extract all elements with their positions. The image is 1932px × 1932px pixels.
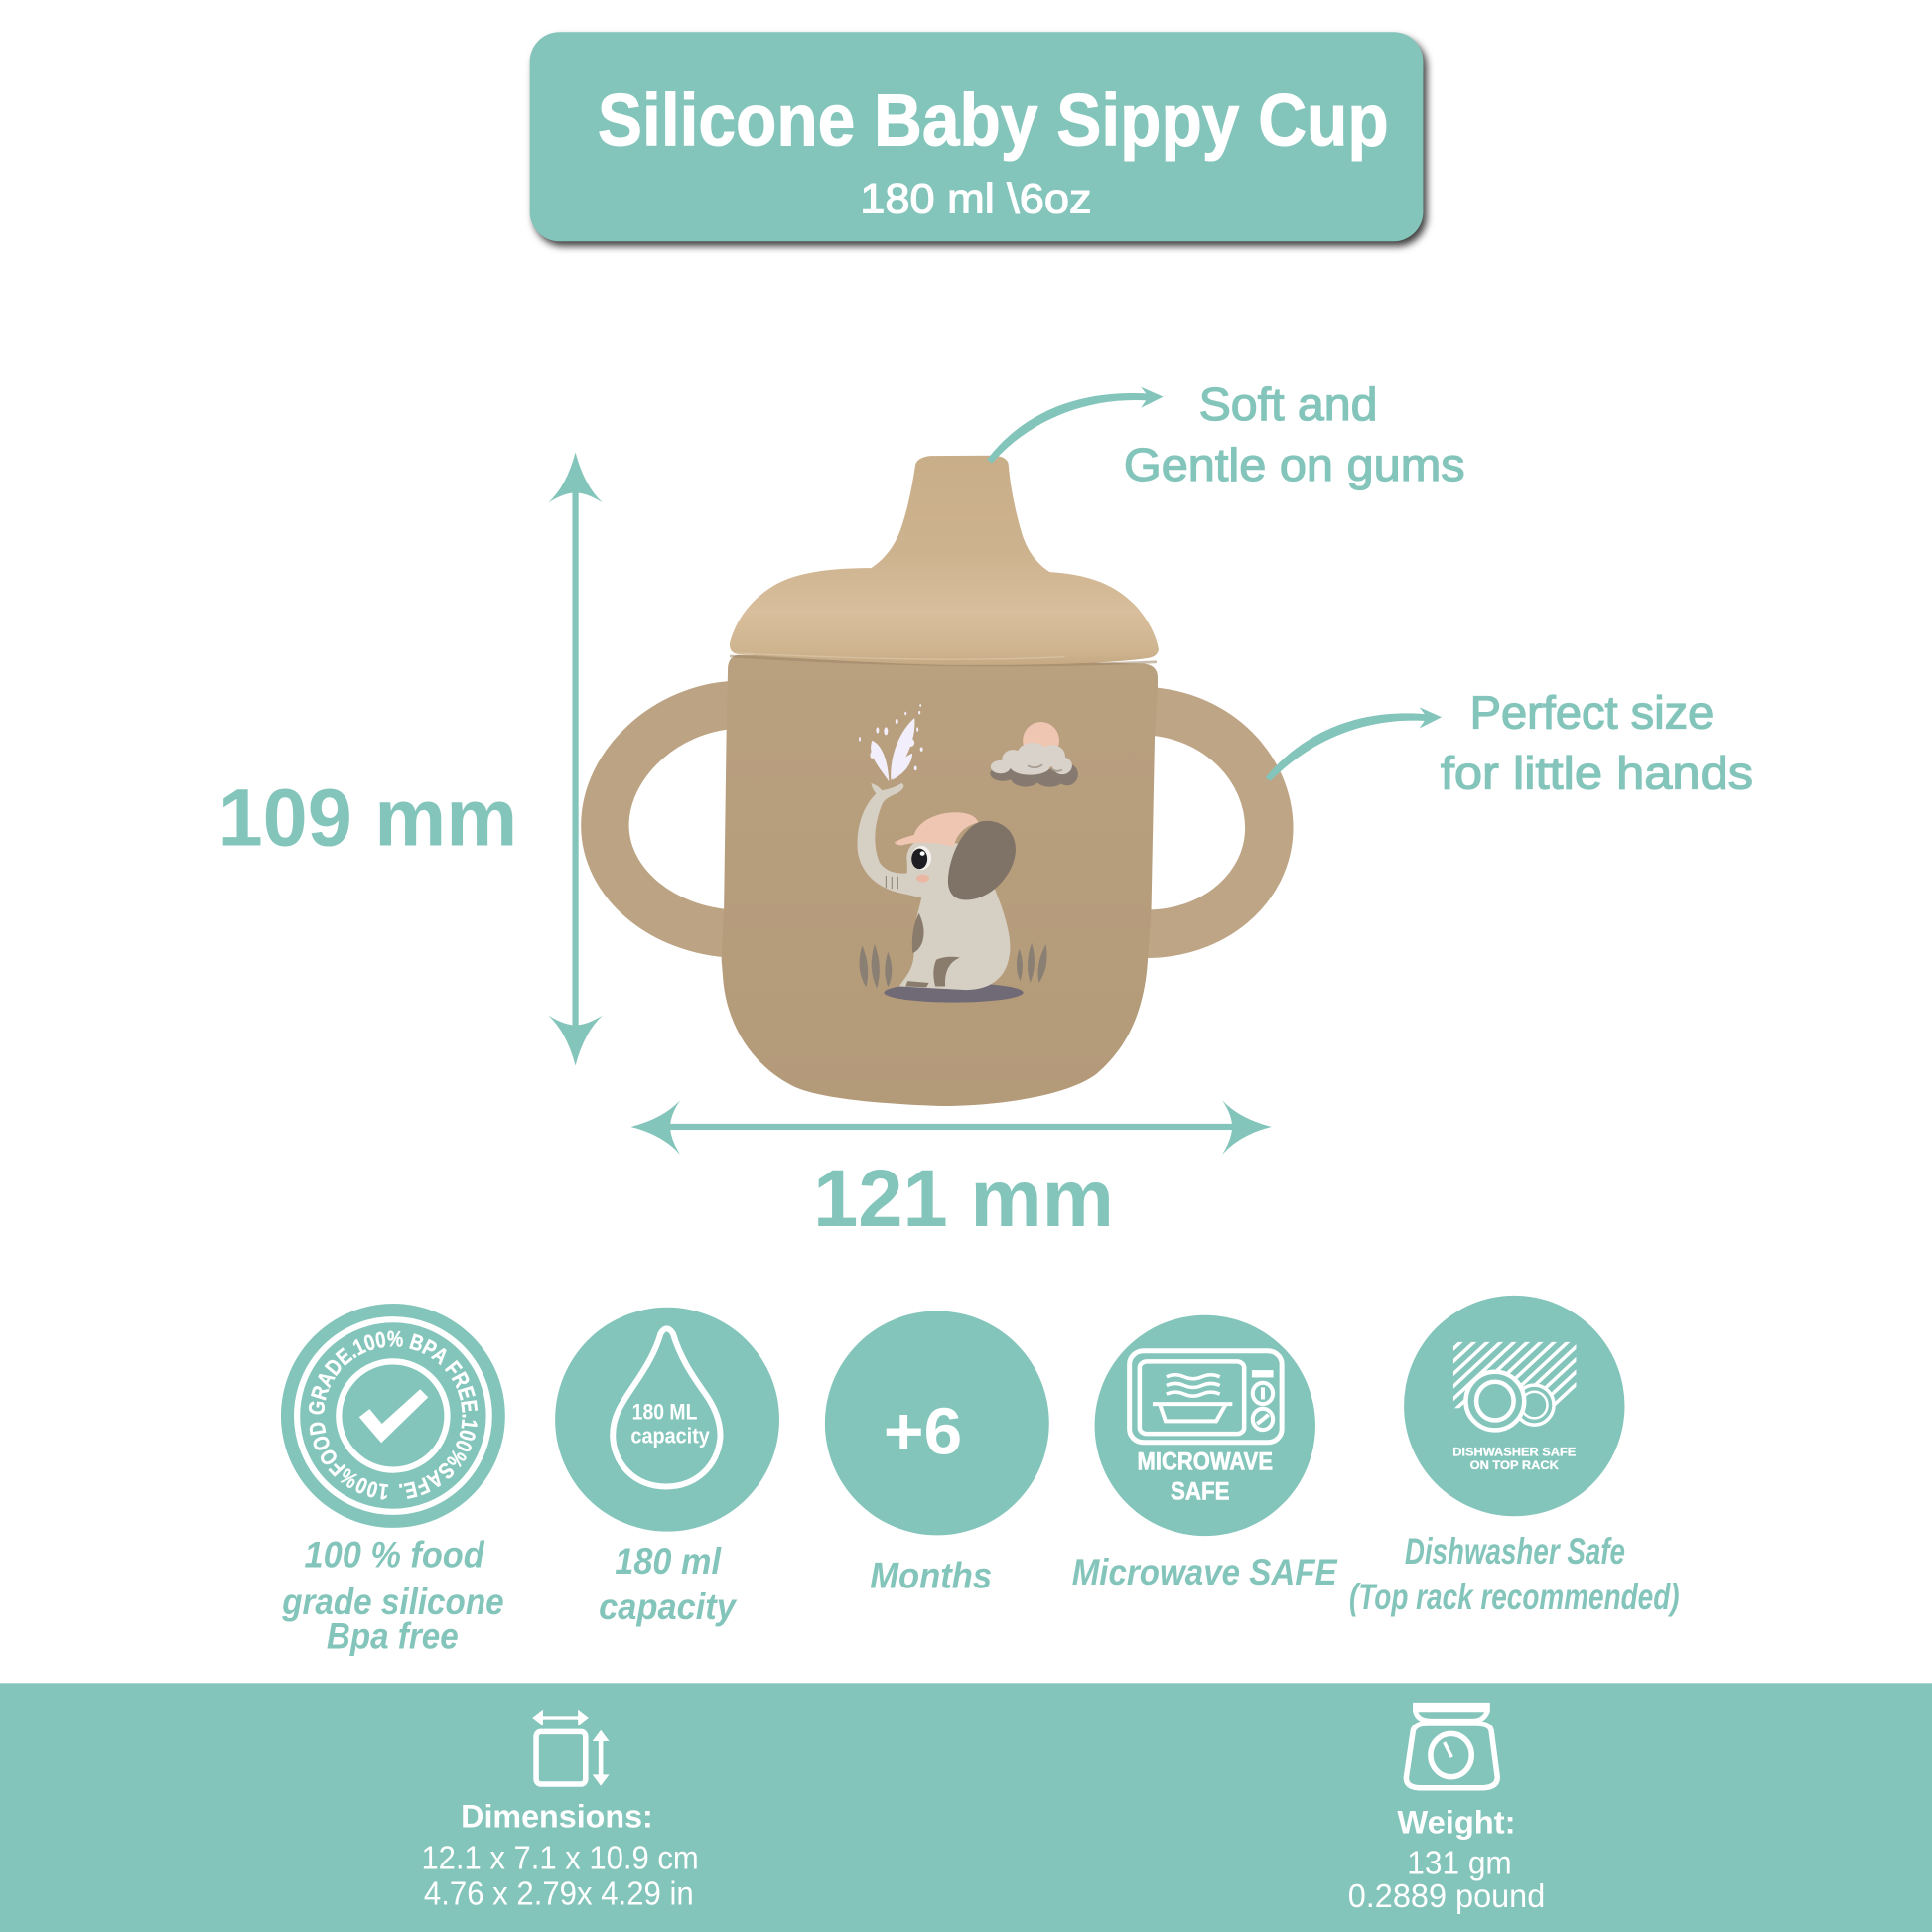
callout: perfect size: Perfect size <box>1470 686 1714 738</box>
subtitle: capacity: 180 ml \6oz <box>860 176 1092 222</box>
lid rim highlight <box>735 653 1064 659</box>
footer band <box>0 1683 1932 1932</box>
cup lid with spout <box>730 456 1159 665</box>
dimensions values: 4.76 x 2.79x 4.29 in <box>424 1876 694 1913</box>
microwave label: MICROWAVE <box>1138 1449 1273 1476</box>
caption: dishwasher: Dishwasher Safe <box>1405 1530 1625 1572</box>
title text: Silicone Baby Sippy Cup <box>598 78 1389 161</box>
curved arrow to handle <box>1266 707 1442 781</box>
eye <box>911 846 931 870</box>
product: sippy cup <box>605 456 1269 1106</box>
callout: perfect size: for little hands <box>1441 747 1753 798</box>
weight heading: Weight: <box>1397 1805 1516 1841</box>
title banner <box>530 32 1423 241</box>
trunk lines <box>886 876 897 889</box>
lid shadow <box>730 656 1157 665</box>
badge: food grade silicone <box>281 1304 505 1528</box>
badge: capacity: capacity <box>630 1423 710 1448</box>
label: width 121 mm: 121 mm <box>813 1154 1114 1244</box>
cap <box>895 812 978 847</box>
icon: dimensions <box>532 1710 610 1786</box>
water splash <box>859 704 923 781</box>
weight values <box>1348 1846 1545 1915</box>
icon: water drop <box>613 1328 720 1486</box>
age text: +6 <box>884 1394 962 1468</box>
badge: dishwasher safe: ON TOP RACK <box>1470 1458 1559 1472</box>
caption: microwave: Microwave SAFE <box>1072 1551 1338 1592</box>
caption: capacity: capacity <box>599 1586 738 1627</box>
callout: perfect size <box>1441 686 1753 798</box>
caption: dishwasher <box>1349 1530 1680 1617</box>
cloud and sun <box>990 722 1078 787</box>
badge: dishwasher safe <box>1404 1295 1624 1517</box>
dishwasher label: DISHWASHER SAFE <box>1452 1445 1576 1458</box>
caption: food grade: 100 % food <box>305 1534 485 1576</box>
elephant illustration <box>857 783 1047 1003</box>
caption: food grade: Bpa free <box>327 1615 459 1657</box>
badge: microwave safe <box>1095 1315 1315 1536</box>
check mark <box>359 1389 428 1443</box>
curved arrow to spout <box>987 387 1164 464</box>
callout: soft and gentle: Soft and <box>1199 378 1378 430</box>
caption: months: Months <box>870 1555 992 1596</box>
caption: dishwasher: (Top rack recommended) <box>1349 1576 1680 1617</box>
weight values: 131 gm <box>1407 1846 1512 1882</box>
left handle <box>605 705 735 934</box>
badge: months <box>825 1311 1049 1535</box>
caption: food grade: grade silicone <box>281 1581 504 1622</box>
dimensions values <box>421 1841 699 1913</box>
drop text: 180 ML <box>632 1400 697 1425</box>
arrow: width dimension <box>630 1100 1272 1155</box>
body and head <box>899 839 1010 990</box>
label: height 109 mm: 109 mm <box>218 772 517 863</box>
hind leg shading <box>905 957 960 987</box>
dimensions values: 12.1 x 7.1 x 10.9 cm <box>421 1841 699 1877</box>
puddle <box>884 983 1024 1003</box>
arrow: height dimension <box>548 452 603 1066</box>
icon: microwave <box>1130 1351 1282 1443</box>
grass <box>860 943 1047 989</box>
cheek <box>916 875 929 883</box>
back spot <box>912 913 924 953</box>
dimensions heading: Dimensions: <box>461 1799 653 1835</box>
weight values: 0.2889 pound <box>1348 1878 1545 1915</box>
ear <box>948 821 1016 899</box>
icon: weighing scale <box>1406 1705 1497 1788</box>
cup body <box>722 655 1158 1106</box>
trunk <box>857 783 931 897</box>
ring text: 100%FOOD GRADE.100% BPA FREE.100%SAFE. <box>308 1330 479 1500</box>
caption: food grade <box>281 1534 504 1657</box>
caption: capacity <box>599 1540 738 1627</box>
badge: capacity <box>555 1308 779 1532</box>
icon: dishwasher plates <box>1453 1342 1577 1433</box>
callout: soft and gentle: Gentle on gums <box>1124 439 1465 490</box>
callout: soft and gentle <box>1124 378 1465 490</box>
caption: capacity: 180 ml <box>615 1540 722 1582</box>
right handle <box>1141 711 1269 934</box>
badge: microwave safe: SAFE <box>1171 1478 1230 1505</box>
